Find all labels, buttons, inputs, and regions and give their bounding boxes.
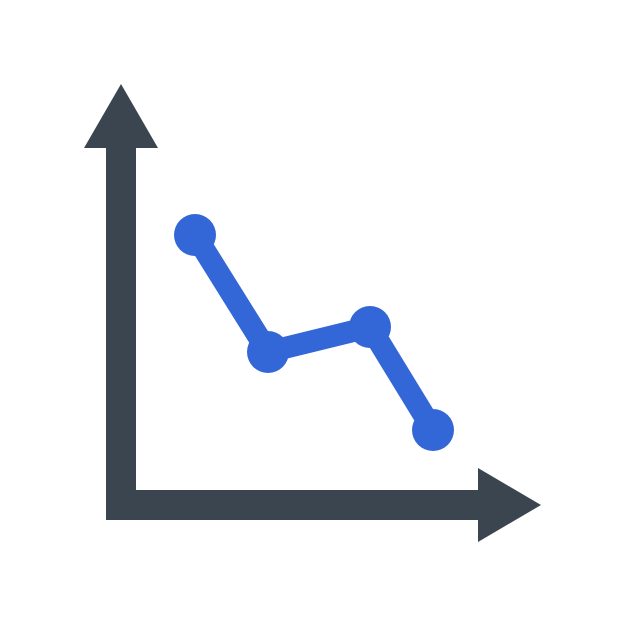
descending line series bbox=[174, 214, 454, 451]
y axis bar bbox=[106, 146, 136, 520]
x axis bar bbox=[106, 490, 480, 520]
data points bbox=[174, 214, 454, 451]
y axis arrowhead bbox=[84, 84, 158, 148]
x axis arrowhead bbox=[478, 468, 541, 542]
axes bbox=[84, 84, 541, 542]
